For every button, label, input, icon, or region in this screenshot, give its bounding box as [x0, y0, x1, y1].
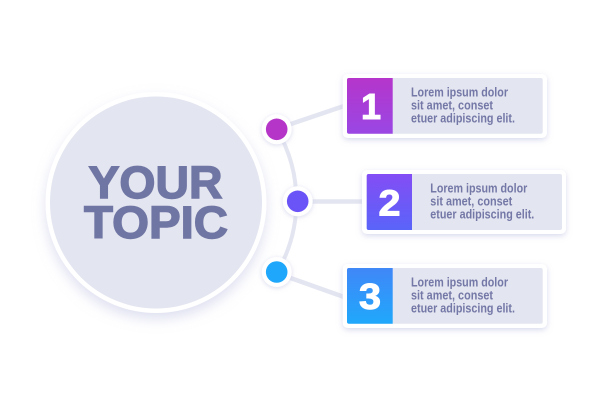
number badge 3: [347, 268, 393, 324]
card 2 text: Lorem ipsum dolor: [430, 182, 527, 196]
card 1 text: Lorem ipsum dolor: [411, 86, 508, 100]
card 3 text: Lorem ipsum dolor: [411, 276, 508, 290]
connector arc: [277, 129, 296, 273]
card 3 text: [411, 276, 515, 316]
node 2: [283, 186, 313, 216]
card 3 text: etuer adipiscing elit.: [411, 302, 515, 316]
card 1 text: [411, 86, 515, 126]
card 3: [343, 264, 547, 328]
number badge 1: 1: [361, 86, 381, 127]
card 2 text: etuer adipiscing elit.: [430, 208, 534, 222]
node 1: [262, 114, 292, 144]
topic title: [84, 157, 228, 248]
node 3: [262, 257, 292, 287]
central topic circle: [46, 92, 266, 313]
connector lines: [285, 106, 363, 297]
card 3 text: sit amet, conset: [411, 288, 494, 302]
topic title: YOUR: [88, 157, 222, 208]
topic title: TOPIC: [84, 197, 228, 248]
number badge 3: 3: [359, 276, 381, 317]
card 2 text: sit amet, conset: [430, 194, 513, 208]
number badge 2: [367, 174, 412, 230]
number badge 2: 2: [378, 182, 400, 224]
card 2: [362, 170, 566, 234]
number badge 1: [347, 78, 393, 134]
card 1: [343, 74, 547, 138]
card 1 text: sit amet, conset: [411, 98, 494, 112]
card 2 text: [430, 182, 534, 222]
card 1 text: etuer adipiscing elit.: [411, 112, 515, 126]
